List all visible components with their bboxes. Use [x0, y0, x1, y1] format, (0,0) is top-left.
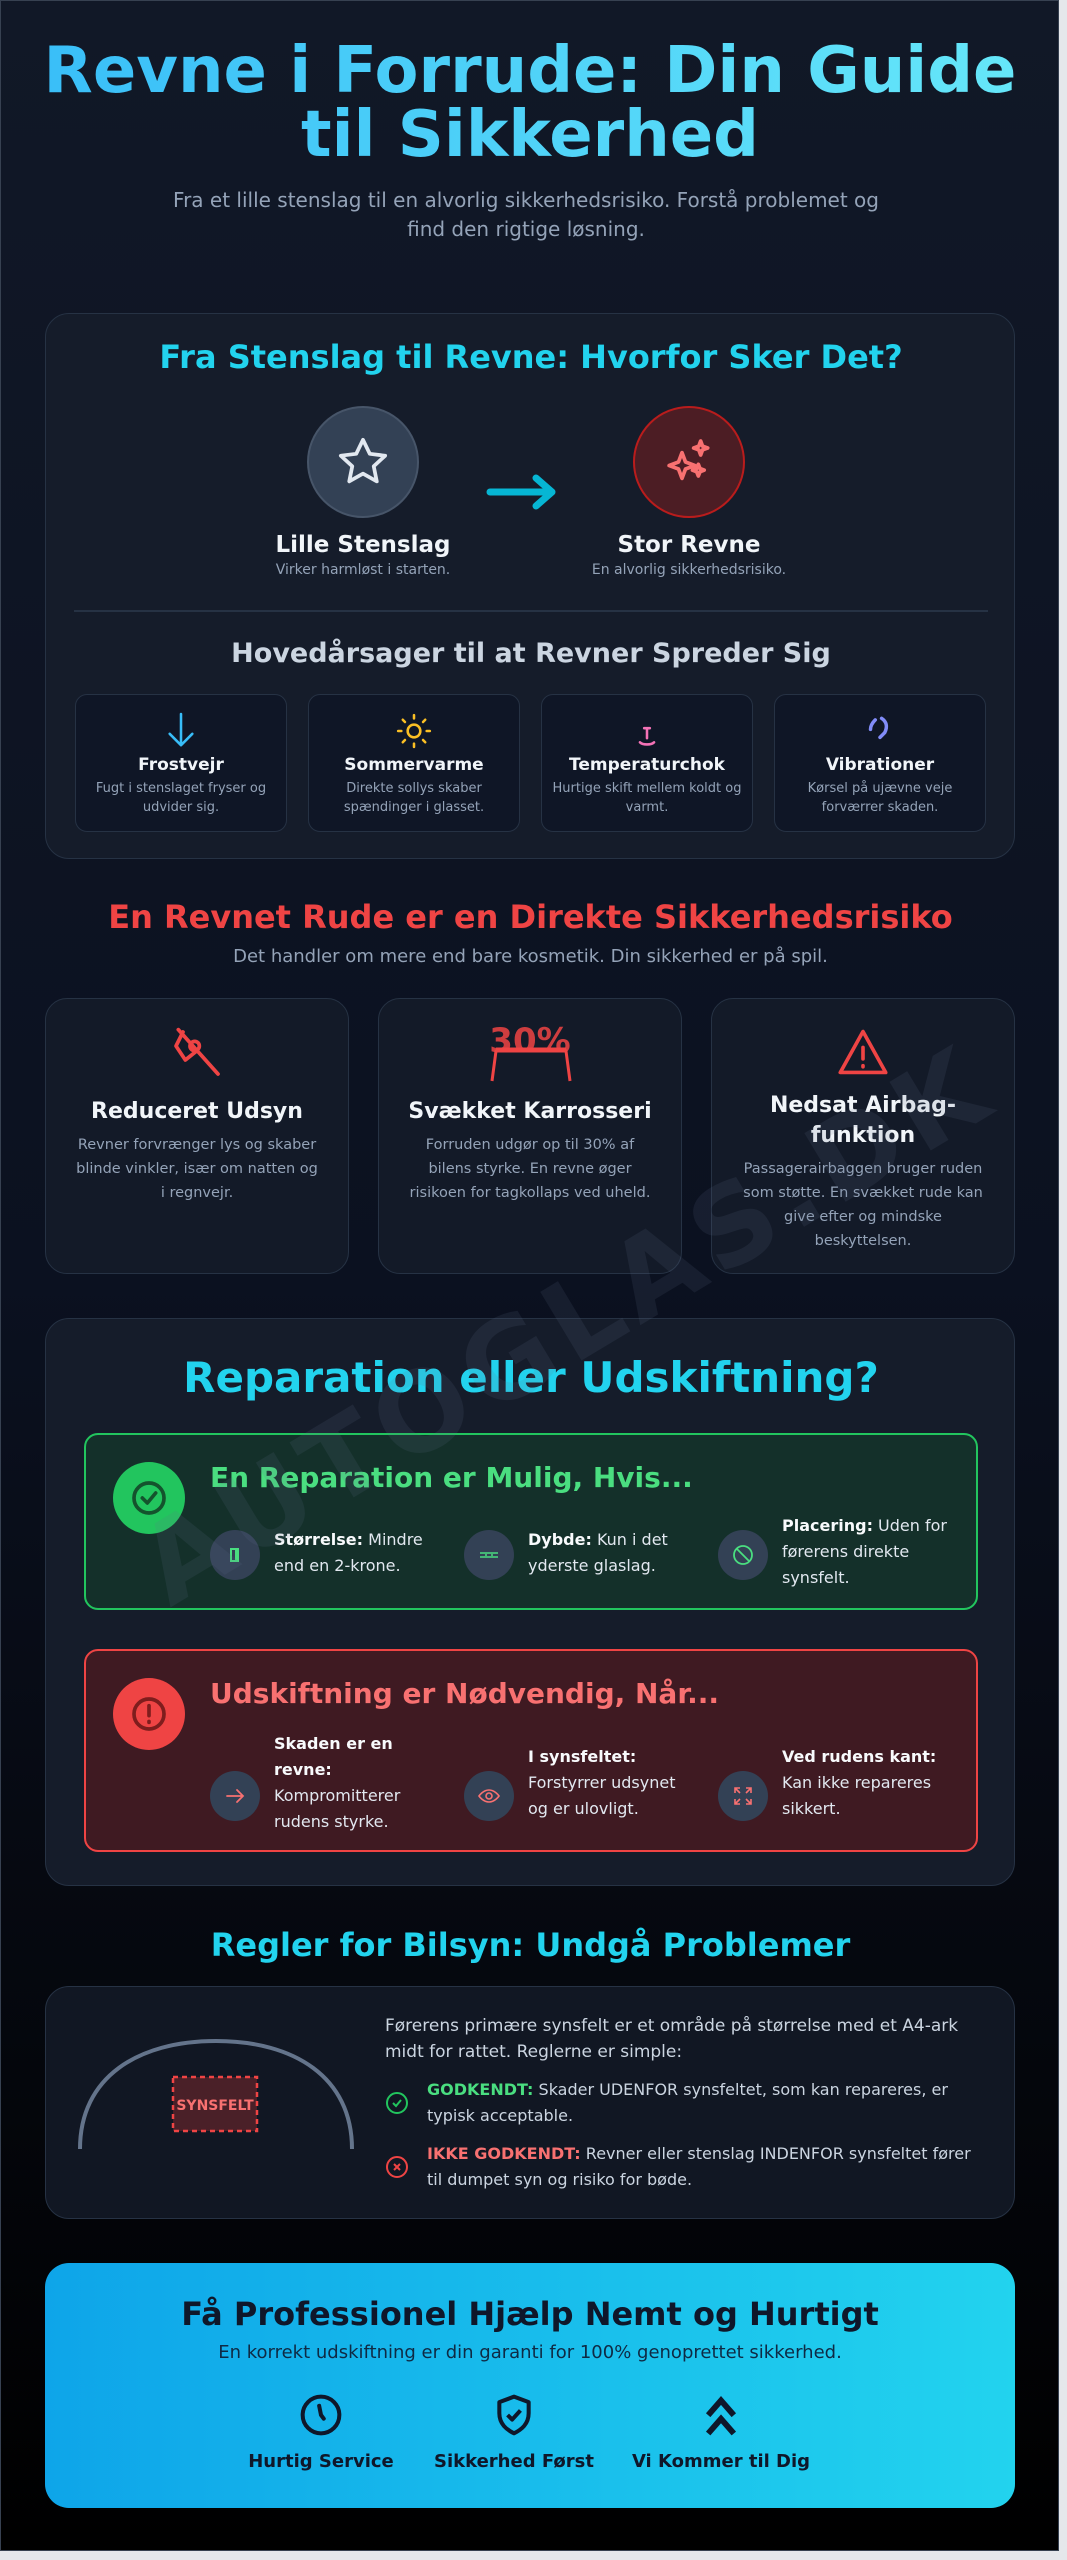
card: summer heat — [308, 694, 520, 832]
title: til Sikkerhed — [301, 98, 759, 172]
label: small chip: Virker harmløst i starten. — [276, 562, 450, 578]
card: airbag: Nedsat Airbag- — [770, 1093, 956, 1118]
rule: approved: GODKENDT: Skader UDENFOR synsfeltet, som kan repareres, er typisk acceptable. — [427, 2080, 948, 2125]
card: vibrations: forværrer skaden. — [822, 800, 938, 815]
box: repair possible — [84, 1433, 978, 1610]
text: rules: Førerens primære synsfelt er et område på størrelse med et A4-ark midt for rattet. Reglerne er simple: — [385, 2016, 958, 2062]
item: depth: Dybde: Kun i det yderste glaslag. — [528, 1530, 668, 1575]
feature: we come to you: Vi Kommer til Dig — [632, 2451, 810, 2472]
subheading: CTA: En korrekt udskiftning er din garanti for 100% genoprettet sikkerhed. — [218, 2342, 842, 2363]
item: edge: Ved rudens kant: Kan ikke repareres sikkert. — [782, 1747, 936, 1818]
title: Revne i Forrude: Din Guide — [44, 34, 1016, 108]
label: big crack — [592, 532, 786, 578]
heading: CTA: Få Professionel Hjælp Nemt og Hurtigt — [181, 2295, 879, 2333]
card: summer heat: Direkte sollys skaber — [346, 781, 482, 796]
subtitle: Fra et lille stenslag til en alvorlig sikkerhedsrisiko. Forstå problemet og find den rigtige løsning. — [173, 188, 879, 241]
item: size: Størrelse: Mindre end en 2-krone. — [274, 1530, 423, 1575]
card: vibrations: Kørsel på ujævne veje — [808, 781, 952, 796]
card: frost: udvider sig. — [143, 800, 219, 815]
card: frost: Frostvejr — [138, 755, 224, 775]
subheading: risk: Det handler om mere end bare kosmetik. Din sikkerhed er på spil. — [233, 946, 828, 967]
box: replacement needed — [84, 1649, 978, 1852]
heading: causes: Fra Stenslag til Revne: Hvorfor Sker Det? — [159, 338, 903, 376]
item: depth — [464, 1530, 668, 1580]
title — [11, 39, 1049, 167]
heading: risk: En Revnet Rude er en Direkte Sikkerhedsrisiko — [108, 898, 953, 936]
card: summer heat: Sommervarme — [344, 755, 484, 775]
card: summer heat: spændinger i glasset. — [344, 800, 484, 815]
card: frost: Fugt i stenslaget fryser og — [96, 781, 266, 796]
diagram: windshield: SYNSFELT — [176, 2098, 254, 2114]
panel: repair or replace — [45, 1318, 1015, 1886]
item: edge — [718, 1747, 936, 1821]
icon: check — [113, 1462, 185, 1534]
item: crack: Skaden er en revne: Kompromitterer rudens styrke. — [274, 1734, 400, 1831]
card: airbag: Passagerairbaggen bruger ruden som støtte. En svækket rude kan give efter og mindske beskyttelsen. — [743, 1161, 983, 1249]
watermark: AUTOGLAS.DK — [118, 1020, 1015, 1630]
icon: alert — [113, 1678, 185, 1750]
card: reduced view — [45, 998, 349, 1274]
feature: fast service — [248, 2394, 394, 2472]
heading: replace: Udskiftning er Nødvendig, Når... — [210, 1677, 719, 1710]
item: field of view — [464, 1747, 676, 1821]
heading: main causes: Hovedårsager til at Revner Spreder Sig — [231, 638, 831, 669]
heading: repair or replace: Reparation eller Udskiftning? — [183, 1353, 879, 1402]
card: reduced view: Revner forvrænger lys og skaber blinde vinkler, især om natten og i regnvejr. — [76, 1137, 318, 1201]
label: big crack: En alvorlig sikkerhedsrisiko. — [592, 562, 786, 578]
heading: inspection rules: Regler for Bilsyn: Undgå Problemer — [211, 1926, 850, 1964]
card: weakened body — [378, 998, 682, 1274]
panel: CTA — [45, 2263, 1015, 2508]
card: reduced view: Reduceret Udsyn — [91, 1099, 303, 1124]
feature: safety first — [434, 2394, 594, 2472]
card: weakened body: 30% — [489, 1021, 571, 1061]
card: vibrations — [774, 694, 986, 832]
card: temperature shock: Temperaturchok — [569, 755, 725, 775]
card: frost — [75, 694, 287, 832]
label: small chip: Lille Stenslag — [275, 532, 450, 558]
panel: causes — [45, 313, 1015, 859]
card: weakened body: Svækket Karrosseri — [408, 1099, 652, 1124]
item: size — [210, 1530, 423, 1580]
feature: fast service: Hurtig Service — [248, 2451, 394, 2472]
rule: not approved: IKKE GODKENDT: Revner eller stenslag INDENFOR synsfeltet fører til dumpet syn og risiko for bøde. — [427, 2144, 971, 2189]
card: airbag — [711, 998, 1015, 1274]
card: temperature shock: varmt. — [626, 800, 668, 815]
card: vibrations: Vibrationer — [826, 755, 934, 775]
feature: we come to you — [632, 2396, 810, 2472]
diagram: windshield — [78, 2039, 354, 2149]
arrow — [486, 474, 556, 510]
heading: repair: En Reparation er Mulig, Hvis... — [210, 1461, 693, 1494]
card: temperature shock — [541, 694, 753, 832]
item: crack — [210, 1734, 400, 1831]
label: big crack: Stor Revne — [618, 532, 760, 558]
card: weakened body: Forruden udgør op til 30% af bilens styrke. En revne øger risikoen for tagkollaps ved uheld. — [410, 1137, 650, 1201]
item: placement: Placering: Uden for førerens direkte synsfelt. — [782, 1516, 947, 1587]
icon: big crack — [633, 406, 745, 518]
item: field of view: I synsfeltet: Forstyrrer udsynet og er ulovligt. — [528, 1747, 675, 1818]
label: small chip — [275, 532, 450, 578]
icon: small chip — [307, 406, 419, 518]
text: rules — [385, 2016, 971, 2189]
feature: safety first: Sikkerhed Først — [434, 2451, 594, 2472]
card: airbag: funktion — [811, 1123, 915, 1148]
card: temperature shock: Hurtige skift mellem koldt og — [553, 781, 741, 796]
panel: inspection — [45, 1986, 1015, 2219]
